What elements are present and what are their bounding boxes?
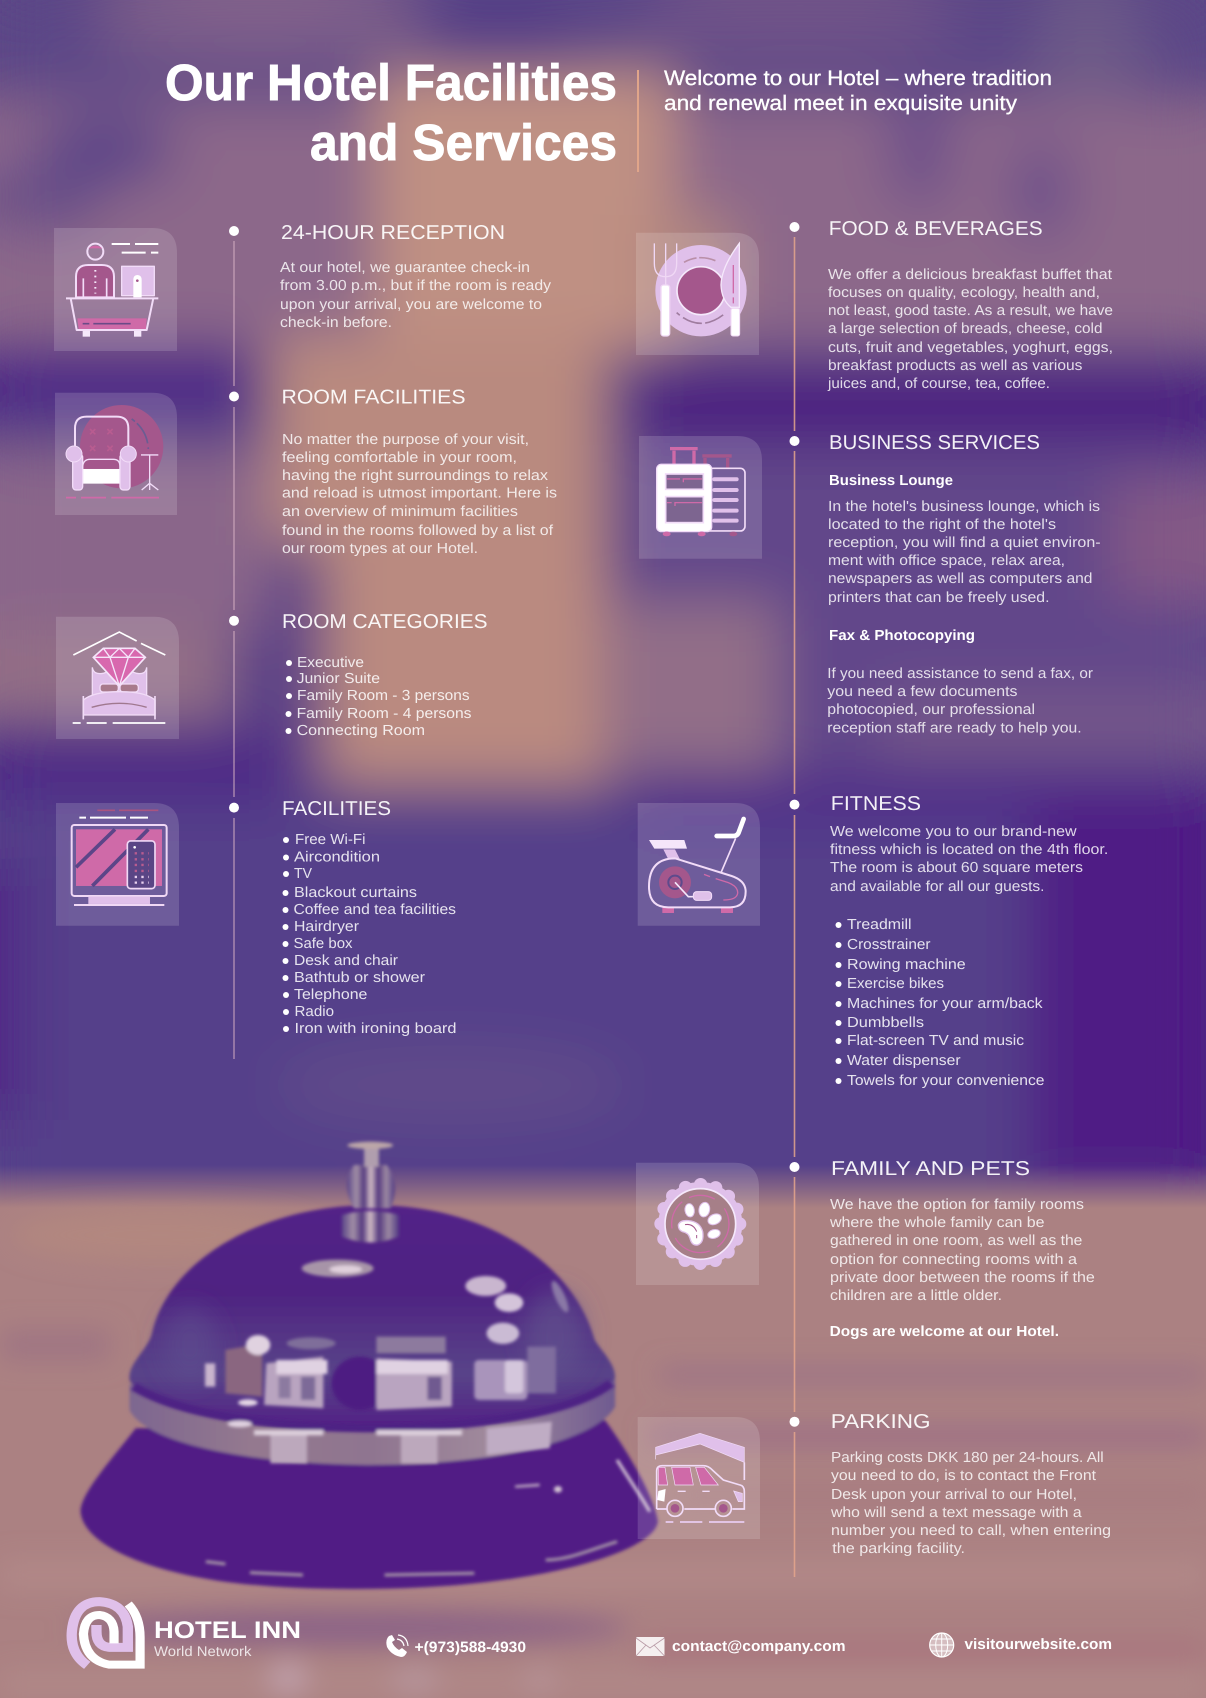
heading: FOOD & BEVERAGES <box>829 218 1043 240</box>
heading: ROOM FACILITIES <box>282 387 466 409</box>
body text: private door between the rooms if the <box>830 1270 1095 1286</box>
body text: business lounge: In the hotel's business lounge, which is <box>828 499 1100 515</box>
bullet list: Family Room - 4 persons <box>297 706 472 722</box>
heading: ROOM CATEGORIES <box>282 611 488 633</box>
bullet list: Coffee and tea facilities <box>294 902 456 918</box>
body text: Parking costs DKK 180 per 24-hours. All <box>831 1450 1104 1466</box>
body text <box>280 260 552 331</box>
title: Our Hotel Facilities <box>165 54 617 111</box>
bullet list: Aircondition <box>294 850 380 866</box>
subtitle: and renewal meet in exquisite unity <box>664 92 1018 115</box>
body text: having the right surroundings to relax <box>282 468 549 484</box>
body text: At our hotel, we guarantee check-in <box>280 260 530 276</box>
heading: FAMILY AND PETS <box>831 1158 1030 1180</box>
icon card: television <box>56 803 179 926</box>
body text: business lounge <box>828 499 1101 606</box>
bullet list <box>282 832 456 1037</box>
body text: No matter the purpose of your visit, <box>282 432 529 448</box>
body text: check-in before. <box>280 315 392 331</box>
body text: business lounge: ment with office space, relax area, <box>828 553 1065 569</box>
bullet list: Telephone <box>294 987 367 1003</box>
body text: an overview of minimum facilities <box>282 504 518 520</box>
body text <box>830 1450 1111 1557</box>
icon: phone <box>386 1635 408 1657</box>
body text: fax: photocopied, our professional <box>827 702 1035 718</box>
icon card: plate and cutlery <box>636 233 759 355</box>
panel: fitness <box>638 793 1108 1089</box>
bullet list: Family Room - 3 persons <box>297 688 470 704</box>
website: visitourwebsite.com <box>964 1636 1112 1653</box>
bullet list: Water dispenser <box>847 1053 961 1069</box>
icon card: luggage <box>639 436 762 559</box>
body text: We offer a delicious breakfast buffet that <box>828 267 1112 283</box>
body text: business lounge: newspapers as well as computers and <box>828 571 1092 587</box>
icon card: paw badge <box>636 1163 759 1285</box>
bullet list <box>836 917 1044 1089</box>
body text: cuts, fruit and vegetables, yoghurt, eggs, <box>828 340 1113 356</box>
body text: business lounge: printers that can be freely used. <box>828 590 1050 606</box>
body text: our room types at our Hotel. <box>282 541 478 557</box>
heading: PARKING <box>831 1411 930 1433</box>
panel: facilities <box>56 798 456 1037</box>
body text: children are a little older. <box>830 1288 1002 1304</box>
bullet list: Towels for your convenience <box>847 1073 1044 1089</box>
body text: fax <box>827 666 1093 736</box>
subtitle: Welcome to our Hotel – where tradition <box>664 67 1052 90</box>
panel: parking <box>638 1411 1111 1557</box>
body text <box>282 432 557 557</box>
bullet list: Connecting Room <box>297 723 425 739</box>
icon: globe <box>930 1633 954 1657</box>
callout: dogs welcome: Dogs are welcome at our Hotel. <box>830 1324 1059 1340</box>
bullet list: Executive <box>297 655 364 671</box>
body text: We have the option for family rooms <box>830 1197 1084 1213</box>
service bell photo <box>81 1142 658 1589</box>
body text: where the whole family can be <box>829 1215 1044 1231</box>
right timeline <box>790 222 800 1577</box>
bullet list: Blackout curtains <box>294 885 417 901</box>
icon card: armchair <box>55 393 177 515</box>
body text: upon your arrival, you are welcome to <box>280 297 542 313</box>
bullet list: Desk and chair <box>294 953 398 969</box>
body text: breakfast products as well as various <box>828 358 1082 374</box>
panel: family and pets <box>636 1158 1095 1340</box>
panel: room categories <box>56 611 488 739</box>
panel: room facilities <box>55 387 557 557</box>
body text: a large selection of breads, cheese, cold <box>828 321 1102 337</box>
body text: number you need to call, when entering <box>831 1523 1111 1539</box>
subheading: fax: Fax & Photocopying <box>829 628 975 644</box>
bullet list: Treadmill <box>847 917 912 933</box>
bullet list: Junior Suite <box>297 671 380 687</box>
icon card: reception desk <box>54 228 177 351</box>
title: and Services <box>310 114 617 171</box>
heading: BUSINESS SERVICES <box>829 432 1040 454</box>
brand name: HOTEL INN <box>154 1617 301 1644</box>
icon: envelope <box>636 1637 664 1656</box>
logo mark <box>72 1602 140 1665</box>
body text: gathered in one room, as well as the <box>830 1233 1082 1249</box>
left timeline <box>229 226 239 1059</box>
icon card: bed and diamond <box>56 617 179 739</box>
body text <box>829 1197 1095 1304</box>
body text: from 3.00 p.m., but if the room is ready <box>280 278 552 294</box>
phone number: +(973)588-4930 <box>414 1639 526 1656</box>
heading: FITNESS <box>831 793 921 815</box>
bullet list: Crosstrainer <box>847 937 931 953</box>
icon card: exercise bike <box>638 803 760 926</box>
bullet list: Radio <box>294 1004 334 1020</box>
body text: juices and, of course, tea, coffee. <box>827 376 1050 392</box>
body text: the parking facility. <box>832 1541 965 1557</box>
bullet list: Dumbbells <box>847 1015 924 1031</box>
brand tagline: World Network <box>154 1643 252 1659</box>
body text: feeling comfortable in your room, <box>282 450 517 466</box>
body text: and available for all our guests. <box>830 879 1044 895</box>
bullet list: Flat-screen TV and music <box>847 1033 1024 1049</box>
body text: and reload is utmost important. Here is <box>282 486 557 502</box>
body text: fax: reception staff are ready to help you. <box>827 720 1082 736</box>
body text: option for connecting rooms with a <box>830 1252 1078 1268</box>
title divider <box>637 70 639 172</box>
bullet list: Machines for your arm/back <box>847 996 1043 1012</box>
body text: fitness which is located on the 4th floor. <box>830 842 1108 858</box>
body text: fax: you need a few documents <box>827 684 1018 700</box>
subheading: business lounge: Business Lounge <box>829 473 953 489</box>
body text: We welcome you to our brand-new <box>830 824 1077 840</box>
heading: 24-HOUR RECEPTION <box>281 222 505 244</box>
body text: you need to do, is to contact the Front <box>831 1468 1096 1484</box>
icon card: car under roof <box>638 1417 760 1539</box>
body text: fax: If you need assistance to send a fax, or <box>827 666 1093 682</box>
heading: FACILITIES <box>282 798 391 820</box>
body text: business lounge: reception, you will find a quiet environ- <box>828 535 1101 551</box>
footer <box>72 1602 1112 1665</box>
body text: business lounge: located to the right of the hotel's <box>828 517 1056 533</box>
body text: focuses on quality, ecology, health and, <box>828 285 1100 301</box>
body text: Desk upon your arrival to our Hotel, <box>831 1487 1077 1503</box>
panel: food and beverages <box>636 218 1113 392</box>
body text <box>830 824 1108 895</box>
panel: business services <box>639 432 1101 736</box>
body text <box>827 267 1113 392</box>
body text: found in the rooms followed by a list of <box>282 523 554 539</box>
email: contact@company.com <box>672 1638 846 1655</box>
bullet list: Hairdryer <box>294 919 359 935</box>
bullet list: Safe box <box>294 936 353 952</box>
bullet list: Free Wi-Fi <box>295 832 366 848</box>
body text: who will send a text message with a <box>830 1505 1083 1521</box>
bullet list <box>286 655 472 739</box>
subtitle <box>664 67 1052 115</box>
bullet list: TV <box>294 866 312 882</box>
bullet list: Rowing machine <box>847 957 966 973</box>
bullet list: Exercise bikes <box>847 976 944 992</box>
panel: 24-hour reception <box>54 222 552 351</box>
body text: The room is about 60 square meters <box>830 860 1083 876</box>
bullet list: Iron with ironing board <box>294 1021 456 1037</box>
body text: not least, good taste. As a result, we have <box>828 303 1113 319</box>
bullet list: Bathtub or shower <box>294 970 425 986</box>
title <box>165 54 617 171</box>
